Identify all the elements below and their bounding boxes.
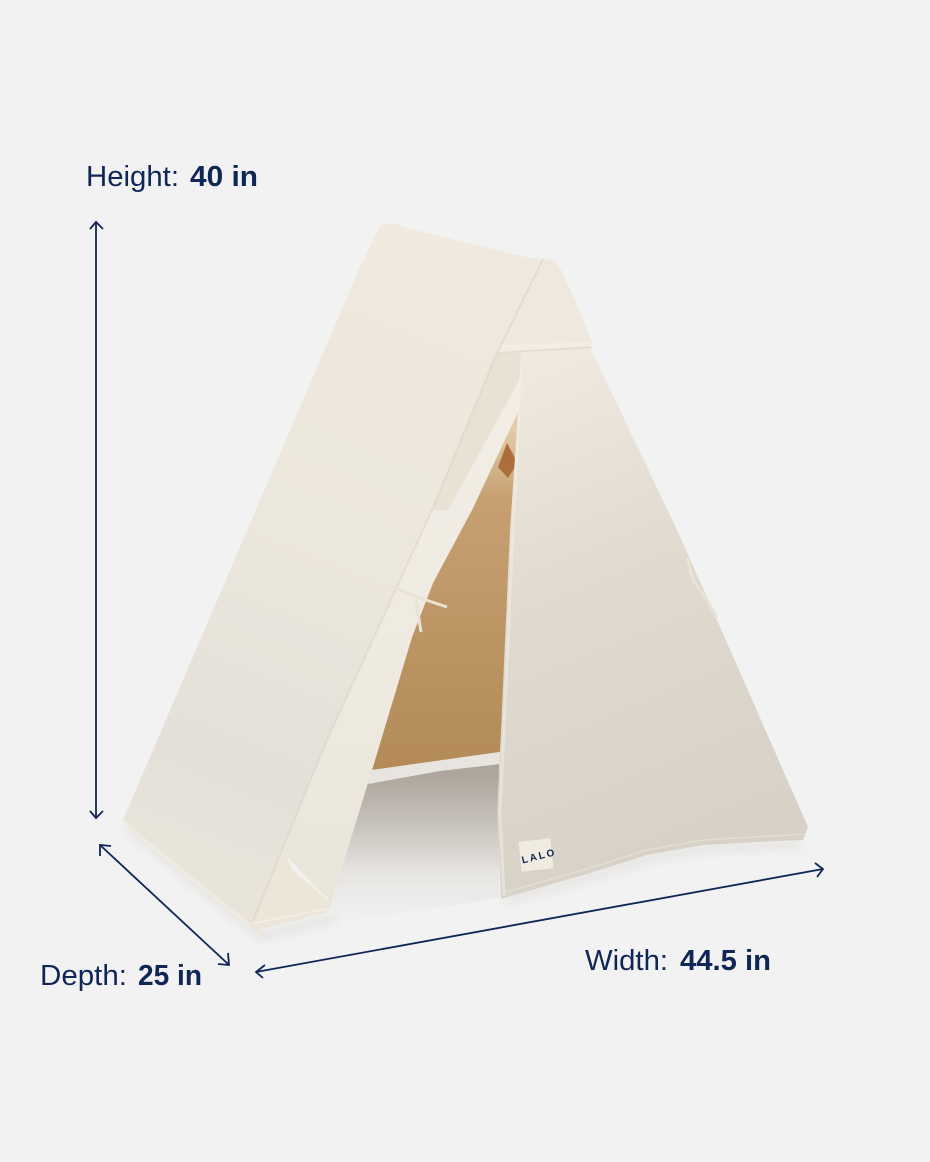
front left flap — [279, 381, 519, 903]
floor shadow — [330, 760, 499, 922]
wooden pole — [498, 443, 515, 478]
ground shadow under tent — [128, 828, 800, 936]
height arrow — [90, 222, 103, 818]
brand label: LALO — [521, 847, 558, 866]
tie rope — [395, 588, 447, 632]
side rope — [687, 557, 717, 618]
depth label: 25 in — [138, 960, 202, 992]
width label: 44.5 in — [680, 945, 771, 977]
tent illustration — [123, 223, 808, 936]
top hood — [497, 259, 592, 352]
fold hem — [254, 858, 329, 923]
left panel bottom hem — [124, 824, 251, 926]
fold at flap bottom — [250, 858, 331, 933]
height label: 40 in — [190, 161, 258, 193]
brand label — [519, 838, 558, 872]
ridge seam lines — [253, 259, 592, 921]
left side panel — [123, 223, 543, 924]
depth arrow — [100, 845, 229, 965]
right panel light edge — [500, 355, 522, 896]
bottom hem of right panel — [503, 834, 804, 893]
height label: Height: — [86, 161, 179, 193]
light band below interior — [368, 752, 500, 784]
hood hem — [498, 342, 592, 353]
tent interior — [372, 410, 519, 770]
width label: Width: — [585, 945, 668, 977]
shaded flap behind tie-back — [430, 353, 522, 515]
depth label: Depth: — [40, 960, 127, 992]
right front panel — [497, 347, 808, 899]
width arrow — [256, 863, 823, 978]
